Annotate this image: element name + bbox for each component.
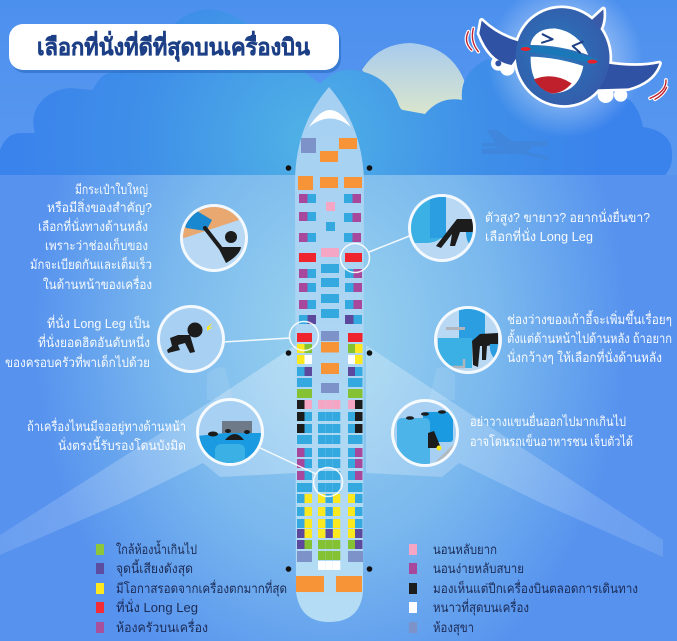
rear lavatories and galleys [296, 551, 363, 592]
callout: long leg icon [408, 194, 476, 262]
text: aisle advice: อาจโดนรถเข็นอาหารชน เจ็บตัวได้ [470, 432, 633, 449]
legend: right column: นอนง่ายหลับสบาย [433, 561, 524, 576]
title banner [9, 24, 341, 73]
legend: right column: นอนหลับยาก [433, 542, 497, 557]
text: family advice: ของครอบครัวที่พาเด็กไปด้วย [5, 353, 150, 370]
front galleys and lavatory [298, 138, 362, 190]
text: family advice: ที่นั่งยอดฮิตอันดับหนึ่ง [38, 334, 150, 350]
airplane fuselage [295, 87, 364, 622]
text: luggage advice: มีกระเป๋าใบใหญ่ [75, 182, 148, 197]
text: aisle advice [470, 413, 633, 449]
title banner: เลือกที่นั่งที่ดีที่สุดบนเครื่องบิน [37, 30, 310, 62]
callout: aisle arm icon [391, 399, 459, 468]
text: family advice [5, 314, 150, 370]
seat map [296, 138, 363, 592]
legend: left column: มีโอกาสรอดจากเครื่องตกมากที่สุด [116, 580, 287, 597]
text: luggage advice: เพราะว่าช่องเก็บของ [45, 236, 148, 253]
text: luggage advice: หรือมีสิ่งของสำคัญ? [47, 199, 152, 215]
text: screen advice [27, 418, 186, 453]
mascot face [521, 28, 597, 93]
text: luggage advice [30, 182, 152, 292]
text: family advice: ที่นั่ง Long Leg เป็น [47, 314, 150, 331]
mascot body [479, 0, 659, 117]
cockpit windshield [309, 110, 351, 127]
text: luggage advice: มักจะเบียดกันและเต็มเร็ว [30, 255, 152, 272]
highlight rings and connector lines [223, 235, 412, 496]
text: long leg advice: เลือกที่นั่ง Long Leg [485, 228, 593, 244]
text: screen advice: นั่งตรงนี้รับรองโดนบังมิด [58, 436, 186, 453]
mascot motion lines [466, 28, 667, 99]
callout: luggage icon [178, 200, 248, 272]
text: long leg advice [485, 209, 650, 244]
legend: left column: ห้องครัวบนเครื่อง [116, 619, 208, 635]
callout: legroom icon [434, 306, 502, 374]
rear cabin centre seats [318, 400, 340, 570]
rear cabin side seats [297, 333, 362, 549]
exit door markers [286, 165, 372, 572]
legend: left column: ที่นั่ง Long Leg [116, 599, 198, 615]
callout: crawling baby icon [157, 305, 225, 373]
front cabin side seats [299, 194, 362, 324]
text: legroom advice [507, 310, 672, 365]
wings [0, 345, 663, 557]
legend: right column: มองเห็นแต่ปีกเครื่องบินตลอดการเดินทาง [433, 579, 638, 596]
legend: right column [409, 542, 638, 636]
legend: left column [96, 540, 287, 635]
mascot: smiling flying plane [466, 0, 667, 117]
text: aisle advice: อย่าวางแขนยื่นออกไปมากเกินไป [470, 413, 626, 429]
front cabin centre seats [321, 202, 339, 318]
text: luggage advice: เลือกที่นั่งทางด้านหลัง [38, 218, 148, 234]
text: long leg advice: ตัวสูง? ขายาว? อยากนั่งยื่นขา? [485, 209, 650, 226]
legend: left column: จุดนี้เสียงดังสุด [116, 559, 193, 577]
legend: left column: ใกล้ห้องน้ำเกินไป [116, 540, 197, 557]
legend: right column: ห้องสุขา [433, 620, 474, 636]
legend: right column: หนาวที่สุดบนเครื่อง [433, 599, 529, 616]
text: screen advice: ถ้าเครื่องไหนมีจออยู่ทางด้านหน้า [27, 418, 186, 435]
small plane silhouette [482, 130, 548, 160]
callout: screen viewing icon [196, 398, 264, 466]
mascot red motion marks [466, 28, 667, 99]
text: legroom advice: นั่งกว้างๆ ให้เลือกที่นั่งด้านหลัง [507, 349, 662, 365]
mascot white outline [479, 0, 659, 117]
text: luggage advice: ในด้านหน้าของเครื่อง [43, 276, 152, 292]
mid galleys and lavatories [321, 331, 339, 393]
